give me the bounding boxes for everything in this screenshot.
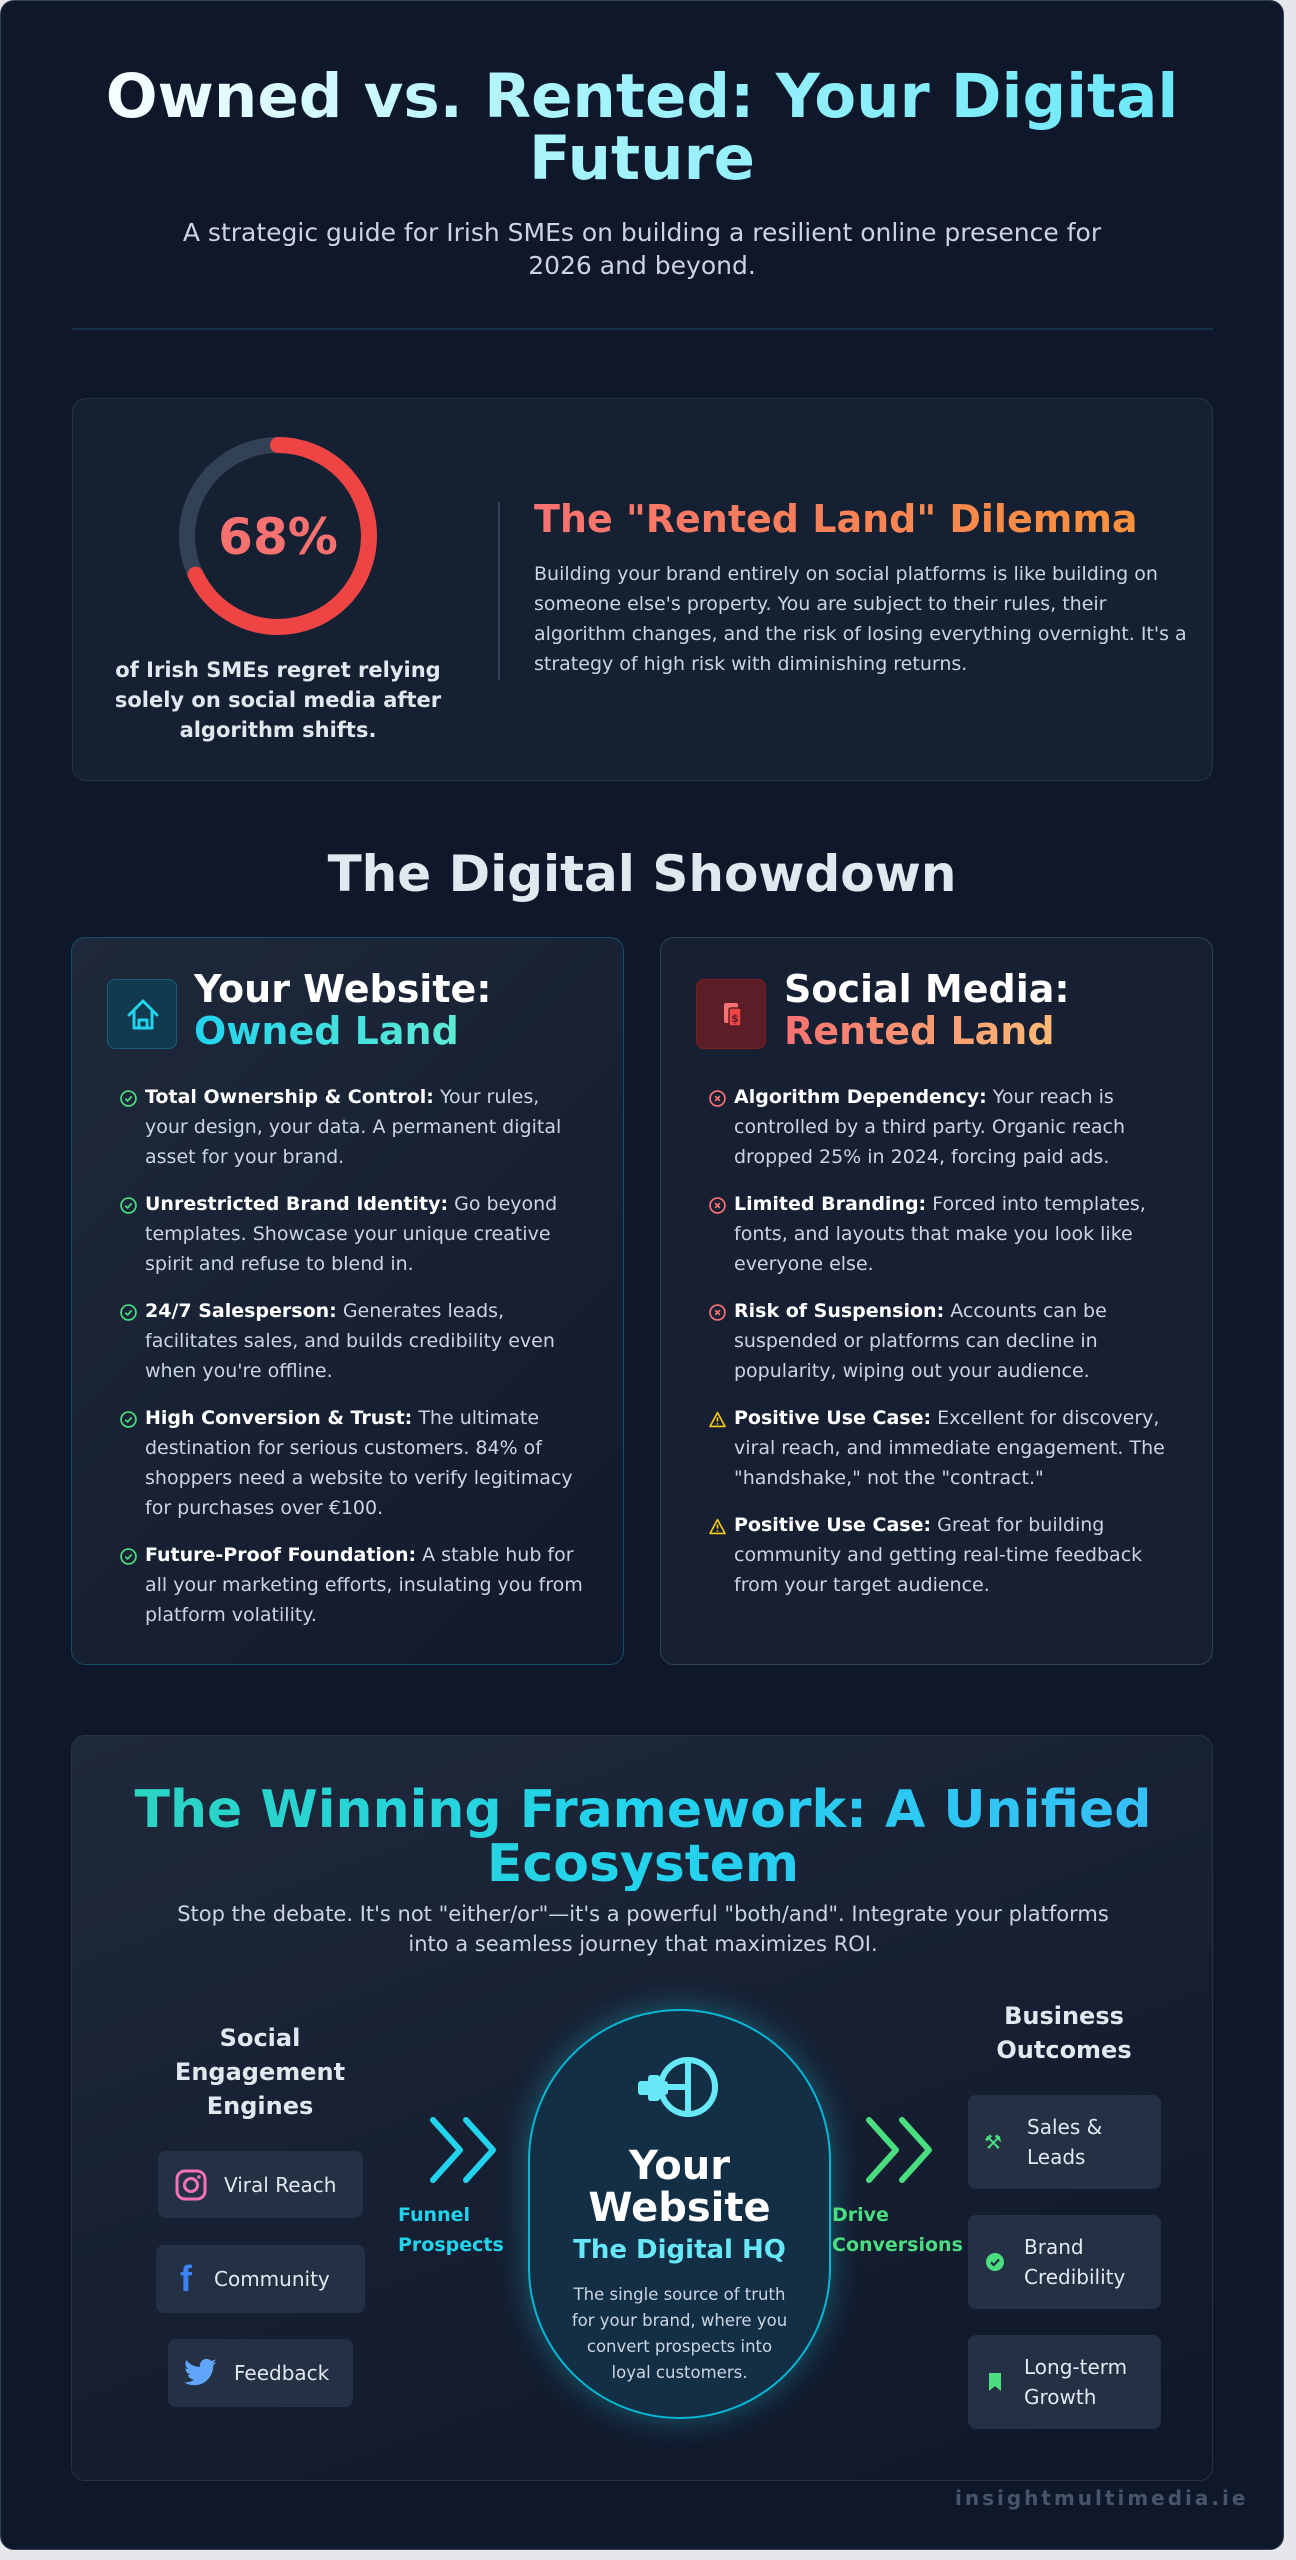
box: sales xyxy=(968,2095,1161,2189)
card heading: Social Media: xyxy=(784,967,1070,1011)
subtitle: A strategic guide for Irish SMEs on building a resilient online presence for 2026 and beyond. xyxy=(183,218,1101,280)
icon: house xyxy=(107,979,177,1049)
donut chart: 68% xyxy=(218,508,338,566)
box: growth xyxy=(968,2335,1161,2429)
list: rented risks: Algorithm Dependency: Your reach is controlled by a third party. Organic reach dropped 25% in 2024, forcing paid ads. xyxy=(734,1086,1125,1168)
box: credibility: Brand xyxy=(1024,2235,1084,2259)
card heading: Rented Land xyxy=(784,1009,1055,1053)
column title: social engines: Social Engagement Engines xyxy=(175,2024,345,2120)
heading: showdown: The Digital Showdown xyxy=(328,845,956,903)
icon: social: $ xyxy=(731,1012,739,1025)
icon: social xyxy=(696,979,766,1049)
list: rented risks xyxy=(709,1086,1165,1596)
pill: viral reach xyxy=(158,2151,363,2218)
box: sales: Sales & xyxy=(1027,2115,1102,2139)
hub title xyxy=(588,2143,771,2231)
donut chart xyxy=(179,437,377,635)
box: credibility: Credibility xyxy=(1024,2265,1125,2289)
arrow: drive xyxy=(866,2117,932,2183)
pill: viral reach: Viral Reach xyxy=(224,2172,336,2196)
box: growth: Growth xyxy=(1024,2385,1096,2409)
card heading: Owned Land xyxy=(194,1009,459,1053)
hub: your website xyxy=(528,2009,831,2419)
framework subtitle: Stop the debate. It's not "either/or"—it's a powerful "both/and". Integrate your platforms into a seamless journey that maximizes ROI. xyxy=(177,1902,1109,1956)
card heading: Your Website: xyxy=(194,967,491,1011)
box: credibility xyxy=(968,2215,1161,2309)
list: owned benefits: 24/7 Salesperson: Generates leads, facilitates sales, and builds credibility even when you're offline. xyxy=(145,1300,555,1382)
pill: community: f xyxy=(180,2258,192,2299)
arrow: funnel xyxy=(430,2117,496,2183)
label: funnel prospects xyxy=(398,2204,504,2256)
list: rented risks: Risk of Suspension: Accounts can be suspended or platforms can decline in popularity, wiping out your audience. xyxy=(734,1300,1107,1382)
hub subtitle: The Digital HQ xyxy=(573,2235,786,2265)
title: Owned vs. Rented: Your Digital Future xyxy=(106,61,1178,194)
label: drive conversions: Conversions xyxy=(832,2234,963,2256)
label: funnel prospects: Funnel xyxy=(398,2204,470,2226)
hub title: Your xyxy=(629,2143,730,2189)
pill: feedback xyxy=(168,2339,353,2407)
framework title: The Winning Framework: A Unified Ecosystem xyxy=(134,1780,1151,1894)
hub title: Website xyxy=(588,2185,771,2231)
card heading xyxy=(784,967,1070,1053)
list: owned benefits: Future-Proof Foundation: A stable hub for all your marketing efforts, insulating you from platform volatility. xyxy=(145,1544,583,1626)
box: sales: ⚒ xyxy=(984,2130,1002,2154)
dilemma body: Building your brand entirely on social platforms is like building on someone else's property. You are subject to their rules, their algorithm changes, and the risk of losing everything overnight. It's a strategy of high risk with diminishing returns. xyxy=(534,563,1187,675)
icon: hub xyxy=(638,2057,718,2117)
list: rented risks: Positive Use Case: Excellent for discovery, viral reach, and immediate engagement. The "handshake," not the "contract." xyxy=(734,1407,1165,1489)
label: drive conversions xyxy=(832,2204,963,2256)
list: rented risks: Limited Branding: Forced into templates, fonts, and layouts that make you look like everyone else. xyxy=(734,1193,1146,1275)
list: owned benefits: High Conversion & Trust: The ultimate destination for serious customers. 84% of shoppers need a website to verify legitimacy for purchases over €100. xyxy=(145,1407,573,1519)
pill: community: Community xyxy=(214,2267,330,2291)
heading: dilemma: The "Rented Land" Dilemma xyxy=(534,497,1138,541)
label: drive conversions: Drive xyxy=(832,2204,889,2226)
panel: framework xyxy=(71,1735,1213,2481)
card heading xyxy=(194,967,491,1053)
panel: owned xyxy=(71,937,624,1665)
box: sales: Leads xyxy=(1027,2145,1085,2169)
list: owned benefits: Total Ownership & Control: Your rules, your design, your data. A permanent digital asset for your brand. xyxy=(145,1086,561,1168)
label: funnel prospects: Prospects xyxy=(398,2234,504,2256)
list: rented risks: Positive Use Case: Great for building community and getting real-time feedback from your target audience. xyxy=(734,1514,1142,1596)
panel: stat xyxy=(72,398,1213,781)
list: owned benefits: Unrestricted Brand Identity: Go beyond templates. Showcase your unique creative spirit and refuse to blend in. xyxy=(145,1193,557,1275)
pill: community xyxy=(156,2245,365,2313)
column title: outcomes: Business Outcomes xyxy=(996,2002,1132,2064)
hub description: The single source of truth for your brand, where you convert prospects into loyal customers. xyxy=(572,2285,787,2382)
list: owned benefits xyxy=(120,1086,583,1626)
pill: feedback: Feedback xyxy=(234,2361,329,2385)
box: growth: Long-term xyxy=(1024,2355,1127,2379)
panel: rented xyxy=(660,937,1213,1665)
watermark: insightmultimedia.ie xyxy=(955,2486,1248,2510)
stat caption: of Irish SMEs regret relying solely on social media after algorithm shifts. xyxy=(115,658,441,742)
